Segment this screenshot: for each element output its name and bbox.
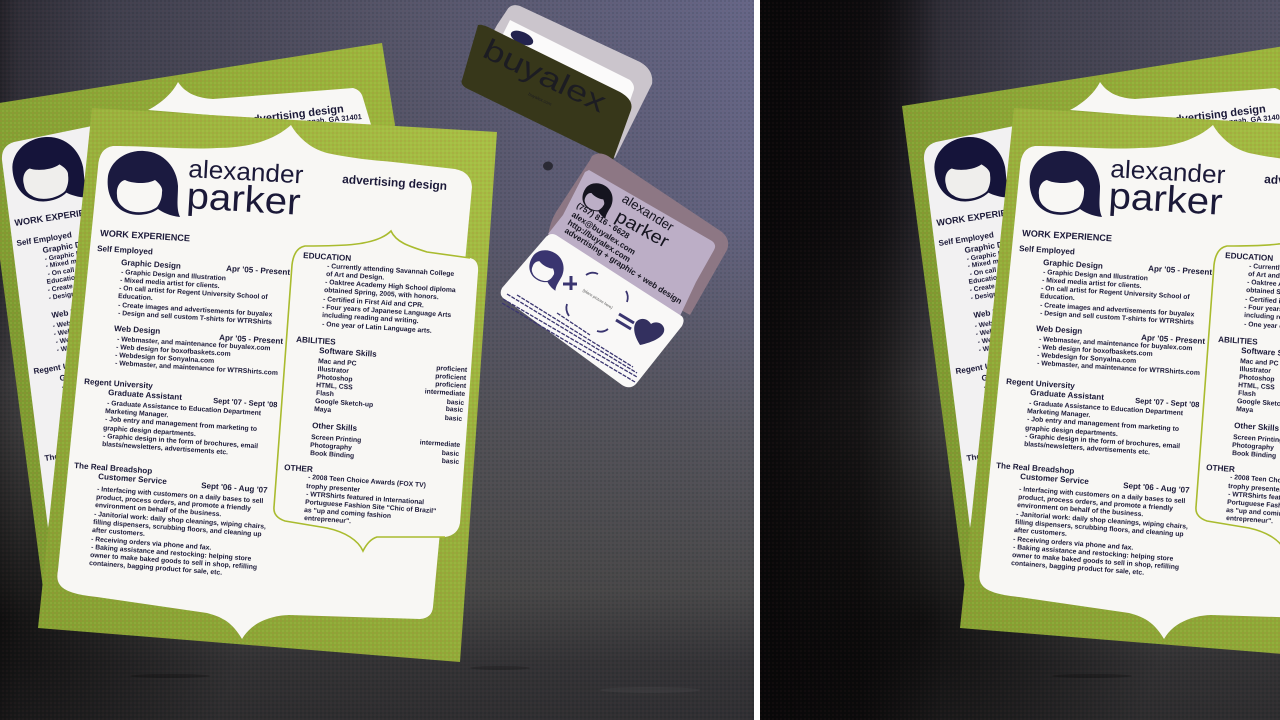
work experience text: Apr '05 - Present — [1148, 264, 1213, 277]
work experience text: containers, bagging product for sale, etc. — [89, 560, 222, 577]
logo — [108, 151, 180, 217]
work experience text: - Webmaster, and maintenance for WTRShirts.com — [115, 360, 278, 377]
work experience text: - Webdesign for Sonyalna.com — [1037, 352, 1136, 365]
work experience text: Marketing Manager. — [105, 408, 169, 419]
work experience text: - Receiving orders via phone and fax. — [1013, 536, 1134, 552]
abilities text: Software Skills — [319, 346, 377, 359]
back sheet text: Graphic Design — [964, 237, 1024, 255]
back sheet text: Graduate Assistant — [59, 362, 134, 383]
work experience text: - Receiving orders via phone and fax. — [91, 536, 212, 552]
back sheet top white area — [148, 82, 372, 128]
work experience text: - Graphic Design and Illustration — [1043, 269, 1148, 282]
abilities text: Illustrator — [1239, 366, 1271, 375]
work experience text: - Job entry and management from marketing to — [1027, 416, 1179, 433]
abilities text: basic — [447, 399, 465, 407]
abilities text: Maya — [1236, 406, 1254, 414]
back sheet text: Web Design — [51, 304, 98, 320]
work experience text: Apr '05 - Present — [226, 264, 291, 277]
work experience text: Sept '06 - Aug '07 — [201, 481, 268, 495]
work experience text: Graphic Design — [121, 258, 181, 271]
back sheet text: - Graphic Design — [44, 248, 99, 263]
panel: left photo — [0, 0, 754, 720]
other text: as "up and coming fashion — [304, 507, 391, 520]
abilities text: Photoshop — [1239, 374, 1275, 383]
back sheet text: Regent University — [955, 356, 1025, 376]
other text — [284, 463, 436, 525]
work experience text: Customer Service — [1020, 472, 1090, 486]
work experience text: - Job entry and management from marketing to — [105, 416, 257, 433]
back sheet heading: WORK EXPERIENCE — [936, 205, 1026, 228]
icon: plus — [563, 276, 577, 290]
card logo — [582, 183, 613, 219]
abilities text: Book Binding — [310, 450, 354, 460]
abilities text: Mac and PC — [318, 358, 357, 368]
education text: - One year of Latin Language arts. — [322, 321, 432, 335]
abilities text: Book Binding — [1232, 450, 1276, 460]
back sheet text: - Webmaster — [56, 341, 98, 354]
work experience text: Regent University — [84, 377, 154, 391]
back sheet text: - Web design — [53, 324, 96, 338]
work experience text: - Web design for boxofbaskets.com — [1038, 344, 1153, 358]
back resume sheet — [902, 43, 1280, 596]
abilities text: proficient — [436, 365, 468, 374]
work experience text: owner to make baked goods to sell in shop, refilling — [1012, 552, 1179, 571]
work experience text: environment on behalf of the business. — [95, 502, 222, 518]
work experience text: Web Design — [1036, 324, 1083, 336]
abilities text: HTML, CSS — [1238, 382, 1275, 391]
other text: OTHER — [284, 463, 313, 474]
work experience text: containers, bagging product for sale, etc. — [1011, 560, 1144, 577]
abilities text: ABILITIES — [296, 335, 336, 347]
other text — [1206, 463, 1280, 525]
work experience text: - Janitorial work: daily shop cleanings, wiping chairs, — [94, 511, 266, 531]
back sheet tagline: advertising design — [246, 103, 345, 127]
abilities text — [1218, 335, 1280, 460]
abilities text: Illustrator — [317, 366, 349, 375]
work experience text: Self Employed — [1019, 244, 1075, 256]
icon: picture placeholder — [566, 273, 628, 332]
panel: education abilities other box — [1196, 231, 1280, 551]
abilities text: Photography — [310, 442, 352, 452]
work experience text: owner to make baked goods to sell in shop, refilling — [90, 552, 257, 571]
back sheet text: - Mixed media — [967, 256, 1013, 270]
work experience text: - Graphic design in the form of brochures, email — [103, 433, 258, 450]
education text — [1225, 251, 1280, 335]
heading: work experience: WORK EXPERIENCE — [1022, 228, 1112, 243]
work experience text: - Graduate Assistance to Education Department — [1029, 400, 1184, 417]
abilities text: Maya — [314, 406, 332, 414]
abilities text: Other Skills — [312, 421, 358, 433]
abilities text: basic — [442, 450, 460, 458]
work experience text: Apr '05 - Present — [219, 333, 284, 346]
abilities text: HTML, CSS — [316, 382, 353, 391]
other text: Portuguese Fashion Site "Chic of Brazil" — [305, 499, 436, 515]
education text: - Certified in First Aid and CPR. — [323, 296, 424, 309]
work experience text: Graphic Design — [1043, 258, 1103, 271]
work experience text: - Graphic Design and Illustration — [121, 269, 226, 282]
card name: alexander — [619, 191, 677, 235]
back sheet text: - On call artist — [969, 264, 1016, 278]
other text: trophy presenter — [306, 483, 361, 494]
name: parker: parker — [186, 175, 302, 223]
work experience text: Sept '07 - Sept '08 — [213, 396, 278, 409]
work experience text: Customer Service — [98, 472, 168, 486]
abilities text: intermediate — [420, 439, 461, 449]
icon: picture placeholder: (place picture here) — [582, 287, 614, 310]
card flap wordmark: buyalex — [478, 33, 611, 119]
work experience text: graphic design departments. — [103, 425, 196, 438]
work experience text: - Graphic design in the form of brochures, email — [1025, 433, 1180, 450]
back sheet text: Education. — [968, 274, 1004, 286]
work experience text: - Graduate Assistance to Education Department — [107, 400, 262, 417]
work experience text: - Webdesign for Sonyalna.com — [115, 352, 214, 365]
work experience text: - Mixed media artist for clients. — [1042, 277, 1142, 290]
card contact details: http://buyalex.com — [566, 218, 632, 264]
back sheet logo — [931, 132, 1011, 208]
name: alexander: alexander — [1110, 155, 1226, 189]
back sheet text: - Create images — [47, 279, 99, 294]
main sheet white area — [57, 125, 472, 639]
work experience text: Graduate Assistant — [108, 388, 183, 402]
icon: equals — [616, 314, 634, 329]
back sheet text: Graduate Assistant — [981, 362, 1056, 383]
work experience text: Education. — [1040, 293, 1075, 302]
tagline: advertising design — [342, 172, 447, 193]
card flap — [462, 25, 632, 160]
abilities text: Other Skills — [1234, 421, 1280, 433]
work experience text: Education. — [118, 293, 153, 302]
abilities text: proficient — [435, 373, 467, 382]
folded business card, front — [501, 154, 728, 387]
abilities text: Photoshop — [317, 374, 353, 383]
work experience text: environment on behalf of the business. — [1017, 502, 1144, 518]
back sheet text: - Webdesign — [55, 333, 96, 346]
work experience text: The Real Breadshop — [74, 461, 153, 476]
other text: entrepreneur". — [304, 515, 351, 525]
back sheet text: - Web design — [975, 324, 1018, 338]
abilities text: Flash — [316, 390, 334, 398]
abilities text: ABILITIES — [1218, 335, 1258, 347]
back sheet text — [16, 232, 78, 461]
back sheet text: The Real — [966, 449, 1001, 463]
work experience text: Sept '06 - Aug '07 — [1123, 481, 1190, 495]
work experience text: - Webmaster, and maintenance for WTRShirts.com — [1037, 360, 1200, 377]
card face icon — [529, 250, 564, 291]
work experience text: - Design and sell custom T-shirts for WTRShirts — [1040, 310, 1194, 326]
panel: education abilities other box — [274, 231, 478, 551]
work experience text: - Interfacing with customers on a daily bases to sell — [1019, 486, 1186, 505]
back sheet text: Regent University — [33, 356, 103, 376]
back sheet text: - Mixed media — [45, 256, 91, 270]
back sheet text: Self Employed — [938, 230, 994, 248]
back sheet text: - Design and — [48, 289, 90, 302]
work experience text: blasts/newsletters, advertisements etc. — [1024, 441, 1150, 456]
work experience text — [74, 244, 291, 577]
work experience text: - Web design for boxofbaskets.com — [116, 344, 231, 358]
work experience text: - Interfacing with customers on a daily bases to sell — [97, 486, 264, 505]
main sheet white area — [979, 125, 1280, 639]
folded business card, back — [462, 5, 652, 160]
work experience text: - Webmaster, and maintenance for buyalex.com — [1039, 336, 1193, 352]
abilities text: Flash — [1238, 390, 1256, 398]
back sheet text: - Webmaster — [974, 317, 1016, 330]
back sheet text: - On call artist — [47, 264, 94, 278]
work experience text: filling dispensers, scrubbing floors, and cleaning up — [93, 519, 262, 538]
work experience text: graphic design departments. — [1025, 425, 1118, 438]
back sheet text: - Graduate — [61, 379, 96, 391]
work experience text: Apr '05 - Present — [1141, 333, 1206, 346]
abilities text: proficient — [435, 381, 467, 390]
work experience text: filling dispensers, scrubbing floors, and cleaning up — [1015, 519, 1184, 538]
education text: EDUCATION — [1225, 251, 1273, 263]
abilities text: Screen Printing — [311, 434, 361, 444]
card fine print lines — [502, 294, 637, 382]
work experience text: Marketing Manager. — [1027, 408, 1091, 419]
back sheet text: - Graphic Design — [966, 248, 1021, 263]
work experience text: - Janitorial work: daily shop cleanings, wiping chairs, — [1016, 511, 1188, 531]
back sheet text: The Real — [44, 449, 79, 463]
card flap small text: buyalex.com — [528, 91, 553, 107]
back sheet text: - Create images — [969, 279, 1021, 294]
work experience text: - Create images and advertisements for buyalex — [118, 302, 273, 318]
heading: work experience: WORK EXPERIENCE — [100, 228, 190, 243]
back sheet heading: WORK EXPERIENCE — [14, 205, 104, 228]
other text: OTHER — [1206, 463, 1235, 474]
back sheet top white area — [1070, 82, 1280, 128]
card contact details: advertising + graphic + web design — [563, 226, 683, 306]
work experience text: product, process orders, and promote a friendly — [96, 494, 251, 512]
back sheet left white area — [2, 126, 90, 528]
education text: including reading and writing. — [322, 312, 419, 325]
abilities text: basic — [445, 415, 463, 423]
work experience text: - Design and sell custom T-shirts for WTRShirts — [118, 310, 272, 326]
name: parker: parker — [1108, 175, 1224, 223]
back sheet left white area — [924, 120, 1022, 528]
education text: EDUCATION — [303, 251, 351, 263]
back resume sheet — [0, 43, 395, 596]
work experience text: Regent University — [1006, 377, 1076, 391]
other text: entrepreneur". — [1226, 515, 1273, 525]
work experience text — [996, 244, 1213, 577]
back sheet text: - Webdesign — [977, 333, 1018, 346]
back sheet text: Web Design — [973, 304, 1020, 320]
card contact details: (757) 816 - 6628 — [575, 201, 631, 241]
work experience text: - Create images and advertisements for buyalex — [1040, 302, 1195, 318]
work experience text: - Baking assistance and restocking: helping store — [91, 544, 252, 563]
education text — [303, 251, 456, 335]
icon: heart — [634, 319, 664, 345]
education text: - Currently attending Savannah College — [327, 263, 455, 278]
work experience text: - Baking assistance and restocking: helping store — [1013, 544, 1174, 563]
back sheet text: Education. — [46, 274, 82, 286]
logo — [1030, 151, 1102, 217]
abilities text: Google Sketch-up — [315, 398, 373, 409]
back sheet text: - Graduate — [983, 379, 1018, 391]
work experience text: - On call artist for Regent University School of — [1041, 285, 1191, 301]
education text: obtained Spring, 2005, with honors. — [324, 287, 439, 301]
abilities text: Photography — [1232, 442, 1274, 452]
back sheet text: - Webmaster — [978, 341, 1020, 354]
back sheet tagline: advertising design — [1168, 103, 1267, 127]
abilities text: intermediate — [425, 388, 466, 398]
card bottom half — [501, 234, 684, 387]
back sheet address: Savannah, GA 31401 — [289, 112, 362, 128]
work experience text: The Real Breadshop — [996, 461, 1075, 476]
folded business card, front: parker — [612, 206, 672, 252]
desk background — [760, 0, 1280, 720]
other text: - WTRShirts featured in International — [306, 491, 424, 506]
education text: - Oaktree Academy High School diploma — [325, 279, 456, 294]
work experience text: - Mixed media artist for clients. — [120, 277, 220, 290]
work experience text: Graduate Assistant — [1030, 388, 1105, 402]
back sheet text: Graphic Design — [42, 237, 102, 255]
work experience text: Self Employed — [97, 244, 153, 256]
main resume sheet — [38, 108, 497, 662]
work experience text: after customers. — [92, 527, 145, 538]
panel: right photo — [760, 0, 1280, 720]
card top half — [548, 154, 728, 315]
work experience text: Web Design — [114, 324, 161, 336]
education text: - Four years of Japanese Language Arts — [322, 304, 452, 319]
back sheet logo — [12, 137, 84, 202]
abilities text — [296, 335, 468, 466]
abilities text: basic — [446, 406, 464, 414]
back sheet text — [938, 230, 1056, 463]
main resume sheet — [960, 108, 1280, 662]
work experience text: - On call artist for Regent University School of — [119, 285, 269, 301]
other text: - 2008 Teen Choice Awards (FOX TV) — [308, 474, 426, 489]
work experience text: blasts/newsletters, advertisements etc. — [102, 441, 228, 456]
education text: of Art and Design. — [326, 271, 385, 282]
abilities text: Mac and PC — [1240, 358, 1279, 368]
work experience text: after customers. — [1014, 527, 1067, 538]
name: alexander: alexander — [188, 155, 304, 189]
back sheet text: Self Employed — [16, 230, 72, 248]
abilities text: basic — [442, 458, 460, 466]
work experience text: product, process orders, and promote a friendly — [1018, 494, 1173, 512]
card contact details: alex@buyalex.com — [570, 210, 637, 257]
work experience text: - Webmaster, and maintenance for buyalex.com — [117, 336, 271, 352]
desk background — [0, 0, 754, 720]
back sheet text: - Webmaster — [52, 317, 94, 330]
work experience text: Sept '07 - Sept '08 — [1135, 396, 1200, 409]
back sheet text: - Design and — [970, 289, 1012, 302]
